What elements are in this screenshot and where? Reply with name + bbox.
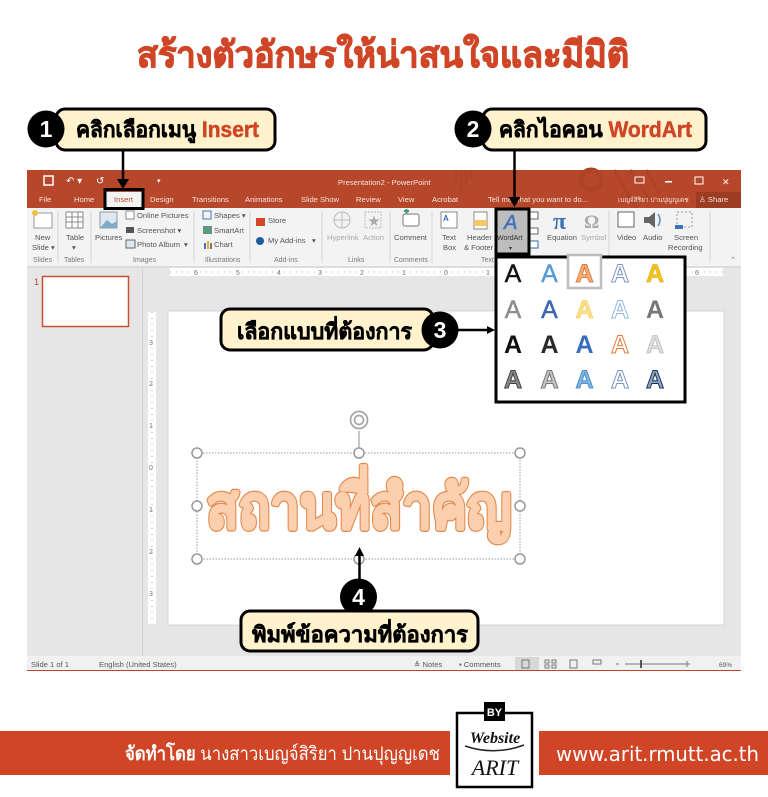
footer bar: credit [0,731,450,775]
ribbon group names: Tables [64,257,85,264]
WordArt button highlight: A [503,212,517,234]
WordArt gallery: A [646,296,664,324]
WordArt button highlight: WordArt [497,235,523,242]
menu tabs: Design [150,195,174,204]
callout 4 [241,578,478,651]
ribbon group names: ⌃ [730,256,736,264]
status bar: English (United States) [99,660,177,669]
WordArt gallery: A [611,296,629,324]
ribbon labels: Text [442,233,457,242]
ribbon icons: π [553,209,566,235]
ruler: 3 [318,270,322,277]
callout 3: 3 [434,317,446,343]
arrow: step 1 to Insert [122,150,124,180]
WordArt gallery: A [504,331,522,359]
WordArt gallery: A [575,260,594,288]
status bar [27,656,741,671]
ribbon group names: Comments [394,257,428,264]
ribbon labels: Screen [674,233,698,242]
WordArt gallery: A [646,260,664,288]
ribbon labels: Header [467,233,492,242]
callout 2: 2 [467,116,479,142]
ribbon labels: & Footer [464,243,494,252]
menu tabs: เบญจ์สิริยา ปานปุญญเดช [618,196,689,204]
ruler: 2 [149,549,153,556]
slide thumbnail pane: 1 [34,277,39,287]
WordArt gallery: A [575,331,594,359]
ribbon labels: Action [363,233,384,242]
ribbon labels: Shapes ▾ [214,211,246,220]
menu tabs: Transitions [192,195,229,204]
ruler: 1 [149,423,153,430]
ribbon icons [32,209,692,249]
menu tabs: Home [74,195,94,204]
WordArt button highlight: ▾ [509,246,512,252]
WordArt gallery: A [540,366,559,394]
ruler: 3 [149,591,153,598]
callout 1 [28,109,275,150]
WordArt gallery: A [504,366,522,394]
ribbon labels: Online Pictures [137,211,189,220]
menu tabs [39,192,689,208]
callout 4: 4 [352,584,365,610]
ribbon labels: Chart [214,240,233,249]
panel: PowerPoint window [27,170,741,671]
ribbon labels: Audio [643,233,662,242]
title bar: Presentation2 - PowerPoint [338,178,431,187]
ribbon labels [32,211,703,252]
ribbon icons: ★ [368,214,380,228]
callout 3: เลือกแบบที่ต้องการ [237,315,412,344]
menu tabs: View [398,195,415,204]
menu tabs: Tell me what you want to do... [488,195,588,204]
WordArt text sample: สถานที่สำคัญ [206,465,512,543]
ribbon group names: Add-ins [274,257,298,264]
WordArt gallery: A [611,366,629,394]
ribbon labels: Comment [394,233,428,242]
ribbon labels: ▾ [312,236,316,245]
ruler: 2 [360,270,364,277]
callout 4: พิมพ์ข้อความที่ต้องการ [252,618,468,647]
ribbon labels: New [35,233,51,242]
ribbon labels: ▾ [184,240,188,249]
ribbon icons: Ω [584,212,599,233]
status bar: ▪ Comments [459,660,501,669]
WordArt gallery [496,255,685,402]
arrow: step 3 to gallery [458,326,495,334]
ruler: 6 [194,270,198,277]
menu tabs: Slide Show [301,195,340,204]
ruler: 1 [402,270,406,277]
slide thumbnail pane [27,268,143,656]
ribbon labels: Recording [668,243,703,252]
footer bar: website [539,731,768,775]
title bar: ▾ [157,178,161,185]
ribbon group names: Slides [33,257,53,264]
ribbon group names: Images [133,257,156,264]
callout 3 [221,309,458,350]
WordArt button highlight [496,209,529,254]
ruler: 5 [236,270,240,277]
ribbon labels: Store [268,216,286,225]
ribbon labels: Table [66,233,84,242]
ruler: 6 [695,270,699,277]
ribbon group names: Links [348,257,365,264]
ribbon labels: Hyperlink [327,233,359,242]
callout 2 [454,109,706,150]
ruler: 4 [277,270,281,277]
ruler: 1 [486,270,490,277]
WordArt text sample: สถานที่สำคัญ [206,465,512,543]
slide canvas [168,311,724,625]
status bar: Slide 1 of 1 [31,660,69,669]
footer bar: credit: จัดทำโดย นางสาวเบญจ์สิริยา ปานปุญญเดช [125,742,440,766]
ribbon labels: SmartArt [214,226,245,235]
menu tabs: File [39,195,51,204]
WordArt gallery: A [541,260,558,288]
WordArt gallery: A [646,331,664,359]
ruler: 3 [149,340,153,347]
title: สร้างตัวอักษรให้น่าสนใจและมีมิติ [137,33,629,75]
title bar: ♙ Share [699,195,728,204]
WordArt gallery: A [575,296,594,324]
title bar: ✕ [722,177,730,187]
ribbon labels: Video [617,233,636,242]
ruler: 1 [149,507,153,514]
logo: Website ARIT: BY [487,707,503,719]
ribbon labels: Screenshot ▾ [137,226,182,235]
title bar: ↺ [96,176,104,187]
ribbon [27,208,741,268]
title bar: ↶ ▾ [66,176,82,187]
WordArt gallery: A [505,260,522,288]
title bar [27,170,741,208]
status bar: ≜ Notes [414,660,443,669]
ribbon group names [33,256,736,264]
WordArt gallery: A [505,296,522,324]
WordArt gallery: A [540,331,559,359]
callout 1: 1 [40,116,53,142]
callout 2: คลิกไอคอน WordArt [499,116,693,142]
ruler [148,268,723,624]
WordArt gallery: A [611,331,629,359]
WordArt gallery: A [611,260,629,288]
ruler: 0 [149,465,153,472]
ribbon labels: My Add-ins [268,236,306,245]
menu tabs: Acrobat [432,195,459,204]
logo: Website ARIT: ARIT [470,755,520,780]
ribbon labels: ▾ [72,243,76,252]
selected text box with handles [192,412,525,564]
menu tabs: Review [356,195,381,204]
ribbon labels: Slide ▾ [32,243,55,252]
ribbon group names: Illustrations [205,257,241,264]
ribbon group names: Text [481,257,494,264]
ribbon icons: A [443,214,449,223]
WordArt gallery: A [646,366,664,394]
ruler: 0 [444,270,448,277]
menu tabs: Insert [114,195,134,204]
ribbon labels: Symbol [581,233,607,242]
logo: Website ARIT [457,702,532,787]
status bar: 69% [719,662,732,669]
callout 1: คลิกเลือกเมนู Insert [76,117,260,144]
Insert tab highlight [105,190,143,208]
footer bar: website: www.arit.rmutt.ac.th [556,742,759,766]
arrow: step 4 to text box [358,552,361,582]
WordArt gallery: A [541,296,558,324]
arrow: step 2 to WordArt [513,150,516,198]
WordArt gallery: A [575,366,594,394]
ribbon labels: Box [443,243,456,252]
ribbon labels: Pictures [95,233,123,242]
ruler: 2 [149,381,153,388]
logo: Website ARIT: Website [470,730,520,747]
icon: rotate handle [350,412,368,428]
ribbon labels: Photo Album [137,240,180,249]
ribbon labels: Equation [547,233,577,242]
menu tabs: Animations [245,195,283,204]
